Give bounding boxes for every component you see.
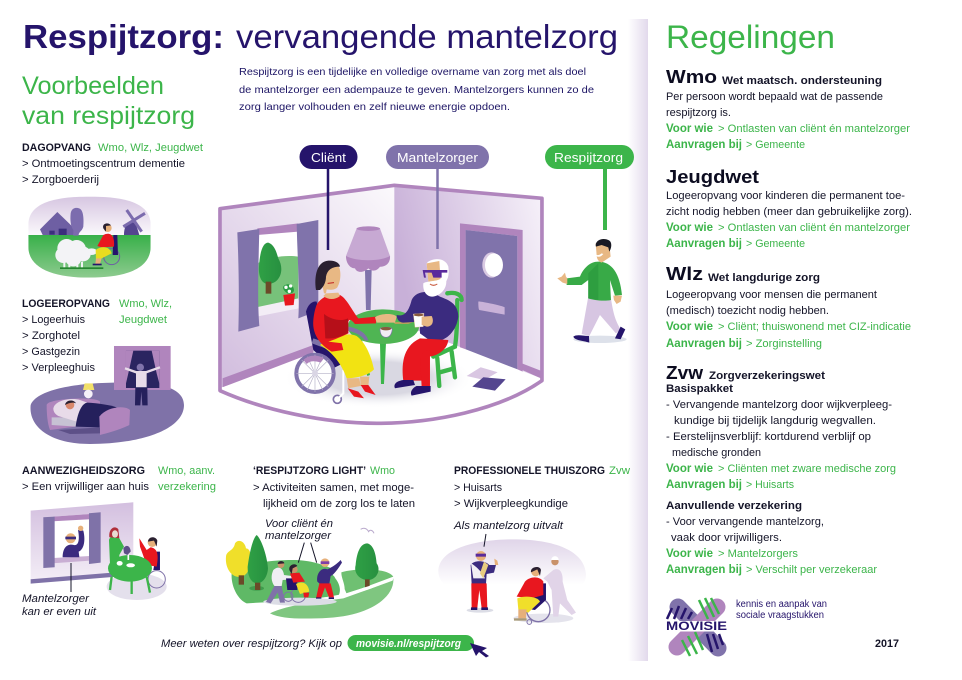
label: client: Cliënt [311, 150, 346, 165]
panel: zvw: Aanvragen bij [666, 564, 742, 576]
walking man [557, 239, 627, 343]
button: website link: movisie.nl/respijtzorg [356, 638, 461, 650]
panel: zvw: vaak door vrijwilligers. [671, 532, 782, 544]
illustration: logeeropvang bedroom [30, 346, 184, 444]
panel: wlz: > Zorginstelling [746, 338, 822, 350]
man with beard [394, 259, 462, 396]
panel: zvw: Aanvullende verzekering [666, 500, 802, 512]
panel: wmo: > Gemeente [746, 139, 805, 151]
panel: wlz: Logeeropvang voor mensen die permanent [666, 289, 877, 301]
panel: jeugdwet: Logeeropvang voor kinderen die permanent toe- [666, 190, 905, 202]
illustration: room scene [220, 185, 627, 423]
panel: wmo: Wet maatsch. ondersteuning [722, 75, 882, 87]
panel: wmo: > Ontlasten van cliënt én mantelzorger [718, 123, 910, 135]
caption: mantelzorger: Mantelzorger [22, 593, 90, 605]
section: respijtzorg light text: mantelzorger [265, 530, 332, 542]
intro text: Respijtzorg is een tijdelijke en volledige overname van zorg met als doel [239, 66, 586, 78]
panel: jeugdwet: > Ontlasten van cliënt én mantelzorger [718, 222, 910, 234]
panel: zvw: Zorgverzekeringswet [709, 370, 825, 382]
panel: zvw: > Cliënten met zware medische zorg [718, 463, 896, 475]
panel: jeugdwet: Voor wie [666, 222, 713, 234]
section: dagopvang text: > Zorgboerderij [22, 174, 99, 186]
logo tagline [736, 599, 827, 621]
panel: jeugdwet: zicht nodig hebben (meer dan gebruikelijke zorg). [666, 206, 912, 218]
panel: zvw: > Verschilt per verzekeraar [746, 564, 877, 576]
panel: jeugdwet: Aanvragen bij [666, 238, 742, 250]
section: professionele thuiszorg text: > Huisarts [454, 482, 502, 494]
panel: wlz [666, 264, 911, 350]
section: respijtzorg light text: ‘RESPIJTZORG LIGHT’ [253, 465, 366, 477]
illustration: dagopvang farm [27, 195, 153, 278]
room walls [222, 187, 541, 422]
panel: wlz: > Cliënt; thuiswonend met CIZ-indicatie [718, 321, 911, 333]
panel: wmo: Per persoon wordt bepaald wat de passende [666, 91, 883, 103]
illustration: aanwezigheidszorg [31, 502, 167, 600]
window [237, 220, 318, 332]
panel: wmo: Voor wie [666, 123, 713, 135]
title [23, 18, 618, 55]
section: aanwezigheidszorg text: AANWEZIGHEIDSZORG [22, 465, 145, 477]
panel: zvw: kundige bij tijdelijk langdurig wegvallen. [674, 415, 876, 427]
intro text: zorg langer volhouden en zelf nieuwe energie opdoen. [239, 101, 510, 113]
label: mantelzorger [386, 145, 489, 249]
section: dagopvang text: > Ontmoetingscentrum dementie [22, 158, 185, 170]
panel: zvw: - Voor vervangende mantelzorg, [666, 516, 824, 528]
panel: zvw: Aanvragen bij [666, 479, 742, 491]
panel: zvw: > Mantelzorgers [718, 548, 798, 560]
panel: zvw: - Vervangende mantelzorg door wijkverpleeg- [666, 399, 892, 411]
section: logeeropvang text: > Gastgezin [22, 346, 80, 358]
panel: jeugdwet [666, 167, 912, 250]
panel: zvw: - Eerstelijnsverblijf: kortdurend verblijf op [666, 431, 871, 443]
section: logeeropvang text: > Zorghotel [22, 330, 80, 342]
door [460, 223, 523, 391]
section: dagopvang text [22, 142, 203, 186]
title: Respijtzorg: [23, 18, 224, 55]
panel: zvw: medische gronden [672, 447, 761, 459]
table [348, 309, 419, 384]
panel: jeugdwet: Jeugdwet [666, 167, 759, 187]
section: logeeropvang text: Jeugdwet [119, 314, 167, 326]
section: professionele thuiszorg text: Zvw [609, 465, 630, 477]
panel: wmo: Aanvragen bij [666, 139, 742, 151]
section: respijtzorg light text: lijkheid om de zorg los te laten [263, 498, 415, 510]
section: professionele thuiszorg text [453, 465, 630, 532]
panel: zvw: > Huisarts [746, 479, 794, 491]
caption: mantelzorger [22, 593, 97, 618]
bottom link text: Meer weten over respijtzorg? Kijk op [161, 638, 342, 650]
icon: cursor arrow [470, 643, 489, 658]
section: logeeropvang text: Wmo, Wlz, [119, 298, 172, 310]
label: mantelzorger: Mantelzorger [397, 150, 479, 165]
floor lamp [346, 226, 390, 310]
section: dagopvang text: DAGOPVANG [22, 142, 91, 154]
section: aanwezigheidszorg text: Wmo, aanv. [158, 465, 215, 477]
label: respijtzorg [545, 145, 634, 230]
panel: wlz: (medisch) toezicht nodig hebben. [666, 305, 829, 317]
decorative column band [628, 19, 648, 661]
logo: movisie: MOVISIE [666, 621, 727, 633]
heading: voorbeelden: van respijtzorg [22, 102, 195, 130]
illustration: park walk [226, 528, 393, 619]
illustration: thuiszorg [438, 534, 586, 624]
room outline [220, 185, 542, 423]
panel: zvw: Voor wie [666, 463, 713, 475]
year: 2017 [875, 638, 899, 650]
logo: movisie [664, 598, 730, 656]
section: logeeropvang text: LOGEEROPVANG [22, 298, 110, 310]
panel: zvw [666, 363, 896, 576]
heading: voorbeelden [22, 72, 195, 130]
logo tagline: kennis en aanpak van [736, 599, 827, 610]
section: logeeropvang text: > Logeerhuis [22, 314, 85, 326]
heading: voorbeelden: Voorbeelden [22, 72, 164, 100]
panel: wmo: respijtzorg is. [666, 107, 731, 119]
heading: regelingen: Regelingen [666, 19, 835, 55]
panel: jeugdwet: > Gemeente [746, 238, 805, 250]
panel: wmo [666, 67, 910, 151]
section: logeeropvang text [22, 298, 172, 374]
section: aanwezigheidszorg text: > Een vrijwilliger aan huis [22, 481, 150, 493]
panel: wlz: Wlz [666, 264, 703, 284]
panel: zvw: Zvw [666, 363, 704, 383]
panel: wmo: Wmo [666, 67, 717, 87]
section: professionele thuiszorg text: Als mantelzorg uitvalt [453, 520, 564, 532]
section: aanwezigheidszorg text: verzekering [158, 481, 216, 493]
panel: zvw: Basispakket [666, 383, 733, 395]
section: logeeropvang text: > Verpleeghuis [22, 362, 95, 374]
section: respijtzorg light text: Wmo [370, 465, 395, 477]
woman in wheelchair [296, 261, 397, 403]
label: client [300, 145, 358, 250]
panel: wlz: Wet langdurige zorg [708, 272, 820, 284]
panel: zvw: Voor wie [666, 548, 713, 560]
panel: wlz: Aanvragen bij [666, 338, 742, 350]
panel: wlz: Voor wie [666, 321, 713, 333]
section: dagopvang text: Wmo, Wlz, Jeugdwet [98, 142, 203, 154]
button: website link [348, 635, 474, 651]
section: professionele thuiszorg text: > Wijkverpleegkundige [454, 498, 568, 510]
intro text [239, 66, 594, 113]
section: aanwezigheidszorg text [22, 465, 216, 493]
title: vervangende mantelzorg [236, 18, 618, 55]
callout line: mantelzorger [70, 563, 72, 592]
logo tagline: sociale vraagstukken [736, 610, 824, 621]
caption: mantelzorger: kan er even uit [22, 606, 97, 618]
section: professionele thuiszorg text: PROFESSIONELE THUISZORG [454, 465, 605, 477]
section: respijtzorg light text [253, 465, 415, 542]
label: respijtzorg: Respijtzorg [554, 150, 623, 165]
intro text: de mantelzorger een adempauze te geven. Mantelzorgers kunnen zo de [239, 84, 594, 96]
section: respijtzorg light text: > Activiteiten samen, met moge- [253, 482, 414, 494]
section: respijtzorg light text: Voor cliënt én [265, 518, 333, 530]
